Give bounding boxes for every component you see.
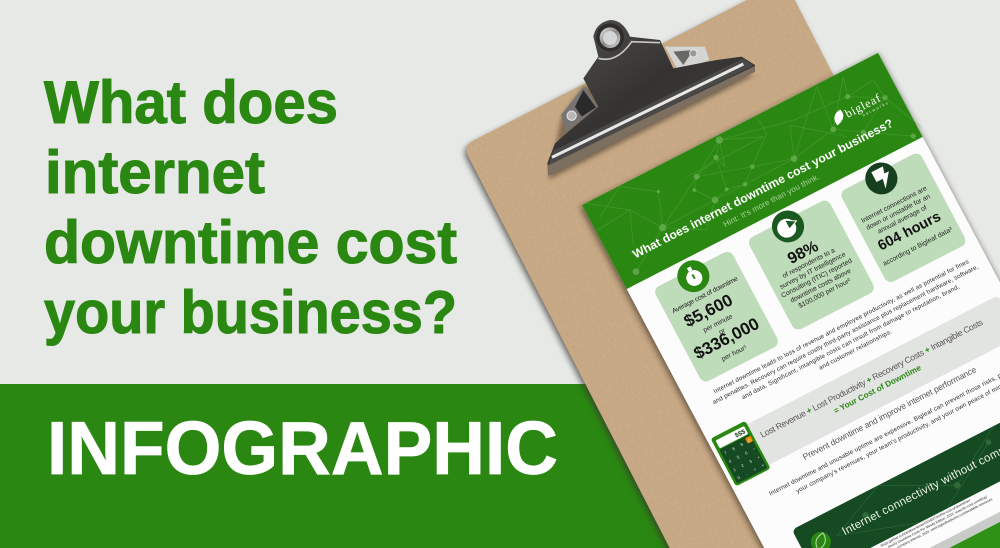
logo subtext: networks — [861, 100, 889, 118]
calculator keys: 3 — [748, 458, 753, 464]
banner leaf icon — [807, 528, 834, 548]
sheet subtitle: Hint: It's more than you think. — [722, 172, 821, 229]
green band — [0, 384, 700, 548]
icon: calculator — [711, 421, 771, 486]
card 3: 604 hours: 604 hours — [875, 209, 944, 254]
calculator display — [716, 426, 748, 448]
card 1: cost of downtime: per minute — [702, 313, 734, 334]
metal clip — [547, 20, 755, 180]
card 1: cost of downtime — [649, 241, 780, 384]
infographic sheet — [582, 53, 1000, 548]
calculator keys: 5 — [736, 454, 741, 460]
card 3: 604 hours: annual average of — [877, 204, 928, 236]
footnotes: company internet, 2020. www.bigleafnetworks.com/available-resources — [897, 497, 993, 548]
icon: lightning — [860, 157, 903, 200]
headline: internet — [45, 139, 265, 206]
logo wordmark: bigleaf — [842, 91, 883, 121]
calculator keys: = — [753, 466, 758, 472]
calculator keys: × — [761, 462, 766, 468]
clip right wing — [665, 47, 709, 71]
sheet header band — [582, 53, 923, 289]
board — [463, 0, 1000, 548]
calculator keys: . — [745, 471, 748, 476]
logo — [831, 89, 889, 130]
calculator keys: + — [756, 454, 761, 460]
card 2: 98 percent: $100,000 per hour² — [798, 277, 853, 310]
paragraph: downtime costs: and customer relationships. — [818, 328, 893, 372]
icon: pie chart — [766, 205, 810, 248]
paragraph: downtime costs: and penalties. Recovery can require costly third-party assistance plus replacement hardware, software, — [711, 264, 980, 406]
card 1: cost of downtime: Average cost of downtime — [671, 276, 740, 315]
card 1: cost of downtime: $5,600 — [681, 290, 736, 331]
infographic sheet shadow — [580, 54, 1000, 548]
headline — [44, 69, 457, 346]
calculator keys: 6 — [744, 450, 749, 456]
calculator keys: 9 — [739, 442, 744, 447]
card 3: 604 hours: down or unstable for an — [865, 193, 932, 232]
card 2: 98 percent: of respondents to a — [781, 247, 837, 280]
calculator keys: C — [747, 438, 752, 443]
card 2: 98 percent — [742, 190, 876, 332]
icon: calculator: $$$ — [734, 428, 747, 440]
headline: What does — [44, 69, 338, 136]
calculator keys: 1 — [732, 467, 737, 472]
formula bar — [740, 295, 1000, 469]
card 3: 604 hours — [835, 143, 968, 284]
clip shadow — [548, 72, 755, 180]
clip top edge highlight — [598, 42, 660, 59]
paragraph: downtime costs: Internet downtime leads to loss of revenue and employee productivity, as well as potential for fines — [713, 258, 970, 395]
headline: downtime cost — [44, 209, 457, 276]
footnotes: Hourly Downtime Costs Per Minute Edition, 2019. www.itic-corp.com/blog/ — [887, 495, 988, 548]
clipboard — [461, 0, 1000, 548]
footnotes: blogs.gartner.com/andrew-lerner/2014/07/16/the-cost-of-downtime/ — [880, 498, 971, 548]
calculator keys: 2 — [740, 462, 745, 468]
formula text: Lost Revenue + Lost Productivity + Recovery Costs + Intangible Costs — [759, 317, 985, 440]
calculator keys: 8 — [731, 446, 736, 451]
sheet header text — [617, 89, 906, 272]
clip body — [547, 20, 755, 176]
formula result: = Your Cost of Downtime — [832, 363, 923, 416]
calculator keys: 0 — [736, 475, 741, 480]
sheet footer — [800, 463, 1000, 548]
logo leaf — [831, 109, 847, 126]
banner network pattern — [836, 426, 994, 536]
calculator keys: 7 — [723, 450, 728, 456]
banner — [794, 422, 1000, 548]
card 3: 604 hours: Internet connections are — [860, 185, 929, 225]
card 2: 98 percent: 98% — [785, 238, 821, 268]
band label: INFOGRAPHIC: INFOGRAPHIC — [47, 406, 558, 490]
card 1: cost of downtime: per hour¹ — [721, 344, 749, 363]
clip lip — [547, 59, 755, 176]
card 2: 98 percent: survey by IT Intelligence — [779, 251, 847, 291]
icon: stopwatch — [672, 255, 715, 298]
calculator keys: − — [752, 446, 757, 452]
headline: your business? — [44, 279, 457, 346]
calculator keys — [723, 436, 767, 480]
card 2: 98 percent: Consulting (ITIC) reported — [780, 257, 854, 300]
clip ring — [596, 23, 624, 51]
card 2: 98 percent: downtime costs above — [789, 268, 853, 305]
subheading: prevent downtime: Prevent downtime and improve internet performance — [801, 364, 978, 462]
clip left wing — [561, 86, 598, 132]
board shadow — [461, 0, 1000, 548]
sheet title: What does internet downtime cost your business? — [630, 116, 896, 261]
paragraph: downtime costs: and data. Significant, intangible costs can result from damage to reputation, brand, — [741, 283, 961, 401]
header network pattern — [587, 77, 925, 275]
calculator keys: 4 — [728, 458, 733, 464]
card 3: 604 hours: according to Bigleaf data³ — [882, 226, 954, 268]
sheet paper — [582, 53, 1000, 548]
card 1: cost of downtime: $336,000 — [691, 314, 762, 363]
card 1: cost of downtime: or — [718, 327, 727, 336]
